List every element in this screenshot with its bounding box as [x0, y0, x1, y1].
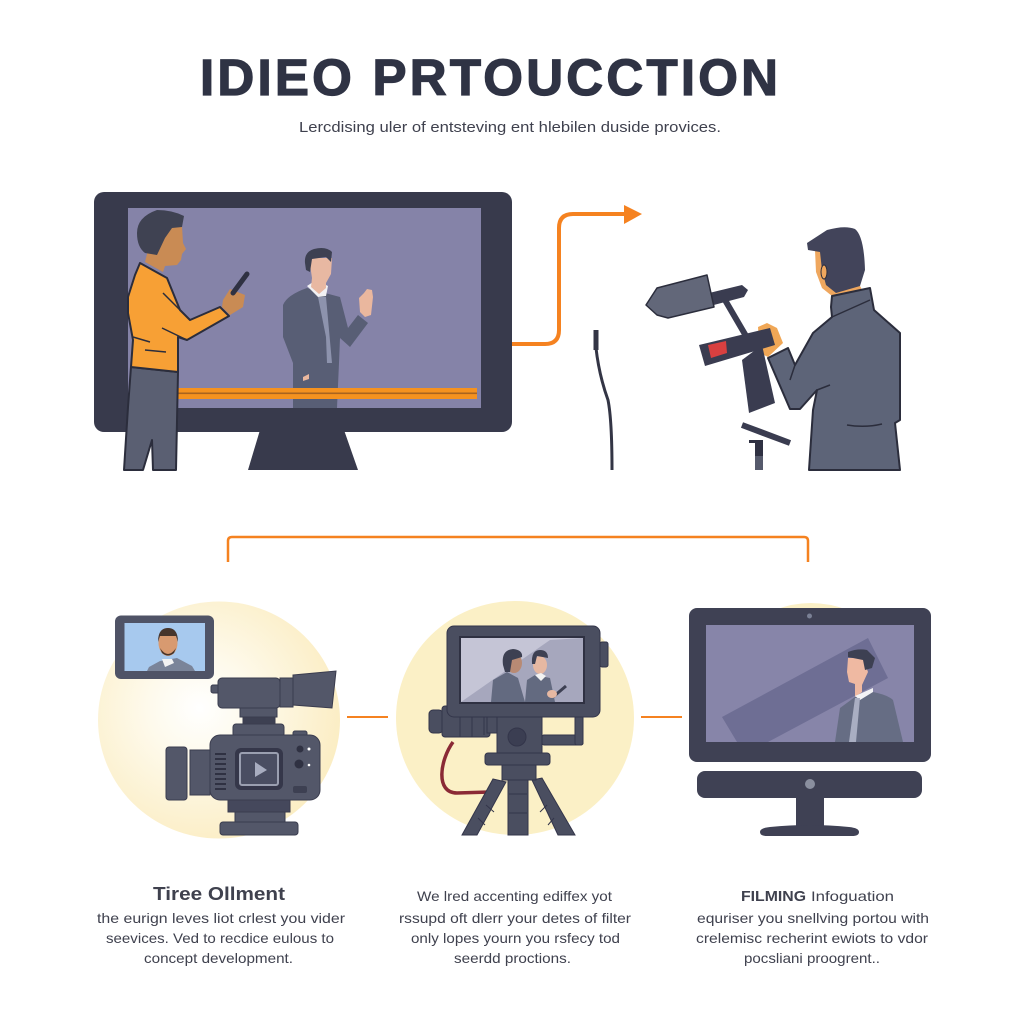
column 1 heading: Tiree Ollment [153, 884, 285, 904]
column 1 body: seevices. Ved to recdice eulous to [106, 930, 334, 946]
panel: video camera [98, 602, 340, 838]
column 3 body [696, 910, 929, 966]
monitor frame [689, 608, 931, 762]
column 3 body: equriser you snellving portou with [697, 910, 929, 926]
column 3 body: pocsliani proogrent.. [744, 950, 880, 966]
diagonal band [722, 638, 888, 742]
text block: column 2: We lred accenting ediffex yot [417, 888, 612, 904]
text block: column 2: seerdd proctions. [454, 950, 571, 966]
text block: column 2: only lopes yourn you rsfecy tod [411, 930, 620, 946]
panel: camera operator [646, 227, 900, 470]
monitor base [760, 825, 859, 836]
operator hand [758, 323, 783, 357]
column 1 body: the eurign leves liot crlest you vider [97, 910, 345, 926]
soundbar [697, 771, 922, 798]
on-screen person [835, 649, 903, 742]
presenter in orange sweater [124, 210, 247, 470]
connector line 2 [641, 716, 682, 718]
column 1 body: concept development. [144, 950, 293, 966]
on-screen presenter [283, 248, 373, 408]
connector line 1 [347, 716, 388, 718]
camera buttons [293, 746, 310, 793]
background circle [98, 602, 340, 838]
background circle [396, 601, 634, 835]
column 3 heading: Infoguation [811, 888, 894, 904]
tripod [462, 753, 575, 835]
handheld grip with red indicator [699, 328, 775, 413]
column 3 heading [741, 888, 894, 905]
text block: column 2 [399, 888, 631, 966]
monitor screen [128, 208, 481, 408]
camera monitor frame [447, 626, 600, 717]
camera monitor screen [459, 636, 585, 704]
red cable [442, 742, 490, 793]
column 3 heading: FILMING [741, 888, 806, 905]
operator body [768, 227, 900, 470]
circle peeking behind monitor [775, 603, 848, 610]
title: IDIEO PRTOUCCTION [200, 49, 778, 106]
panel: desktop monitor [689, 603, 931, 836]
text block: column 3 [696, 888, 929, 966]
soundbar button [805, 779, 815, 789]
monitor neck [796, 798, 824, 826]
text block: column 2: rssupd oft dlerr your detes of filter [399, 910, 631, 926]
camera rig [429, 642, 608, 753]
camera body [166, 671, 336, 835]
text block: column 1 [97, 884, 345, 966]
play button display [235, 748, 283, 790]
tripod head below microphone [742, 425, 790, 470]
panel: studio monitor with presenter [94, 192, 512, 470]
orange lower third bar [178, 388, 477, 399]
monitor frame [94, 192, 512, 432]
microphone stand [596, 330, 612, 470]
bracket connector [228, 537, 808, 562]
monitor stand [248, 430, 358, 470]
boom microphone [646, 275, 748, 336]
arrow: monitor to camera operator [512, 205, 642, 344]
webcam [807, 614, 812, 618]
preview monitor [115, 616, 214, 679]
subtitle: Lercdising uler of entsteving ent hlebilen duside provices. [299, 119, 721, 136]
screen [706, 625, 914, 742]
column 1 body [97, 910, 345, 966]
panel: camera on tripod [396, 601, 634, 835]
column 3 body: crelemisc recherint ewiots to vdor [696, 930, 928, 946]
camera vents [215, 754, 226, 789]
